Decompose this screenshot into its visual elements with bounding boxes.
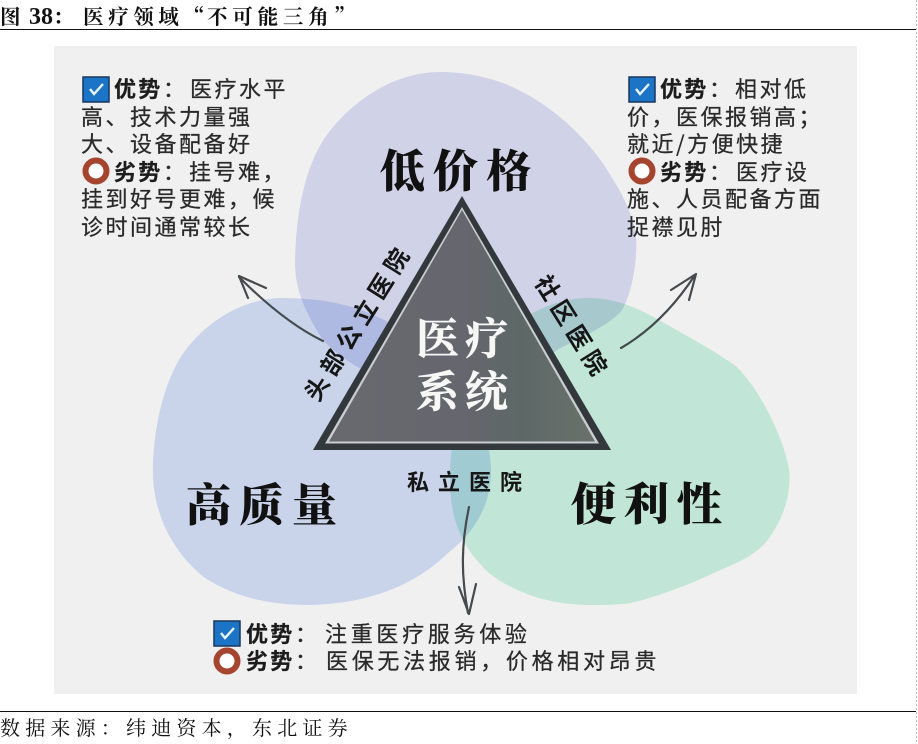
figure title: 38 — [29, 4, 53, 30]
cons text: 医疗设 — [736, 155, 810, 187]
heading: convenience: 便利性 — [571, 468, 730, 533]
panel: triangle illustration background — [54, 46, 857, 694]
source note: 数据来源：纬迪资本，东北证券 — [0, 712, 353, 741]
figure title: 不可能三角 — [207, 0, 334, 30]
cons text: ： — [163, 155, 188, 187]
cons text: 医保无法报销，价格相对昂贵 — [326, 644, 660, 676]
callout: top-left hospital pros and cons — [81, 72, 288, 242]
triangle label: 医疗 — [416, 306, 514, 367]
pros text: 大、设备配备好 — [81, 127, 253, 159]
triangle blobs — [153, 72, 790, 605]
label: community hospitals: 社区医院 — [528, 267, 620, 386]
callout: top-right hospital pros and cons — [627, 72, 823, 242]
triangle label — [416, 306, 514, 420]
cons text: ： — [295, 644, 321, 676]
cons text: 劣势 — [114, 155, 162, 187]
arrow: to top-right text — [621, 274, 696, 348]
arrow: to bottom text — [459, 507, 476, 614]
cons text: 挂到好号更难，候 — [81, 182, 277, 214]
arrow: to top-left text — [239, 276, 323, 341]
cons text: ： — [709, 155, 734, 187]
pros text: ： — [295, 617, 321, 649]
pros text: 医疗水平 — [190, 72, 288, 104]
pros text: 就近/方便快捷 — [627, 127, 785, 159]
cons text: 诊时间通常较长 — [81, 210, 253, 242]
icon: ring — [216, 650, 238, 672]
pros text: 优势 — [246, 617, 294, 649]
triangle outer border — [313, 196, 611, 450]
figure title: ： — [53, 0, 74, 30]
figure title: ” — [334, 0, 354, 30]
cons text: 施、人员配备方面 — [627, 182, 823, 214]
heading: low price: 低价格 — [380, 135, 539, 200]
cons text: 劣势 — [660, 155, 708, 187]
triangle: medical system — [313, 196, 611, 450]
pros text: 优势 — [660, 72, 708, 104]
label: big public hospitals: 头部公立医院 — [294, 236, 419, 407]
cons text: 劣势 — [246, 644, 294, 676]
pros text: ： — [709, 72, 734, 104]
figure title: 图 — [0, 0, 20, 30]
pros text: 优势 — [114, 72, 162, 104]
triangle label: 系统 — [416, 359, 514, 420]
label: private hospitals: 私立医院 — [407, 465, 531, 497]
pros text: ： — [163, 72, 188, 104]
cons text: 挂号难， — [189, 155, 287, 187]
figure title: 医疗领域 — [83, 0, 183, 30]
icon: check — [83, 77, 109, 102]
figure title: “ — [184, 0, 204, 30]
blob: high quality — [153, 298, 491, 605]
pros text: 相对低 — [735, 72, 809, 104]
pros text: 注重医疗服务体验 — [325, 617, 531, 649]
pros text: 高、技术力量强 — [81, 100, 253, 132]
triangle fill — [329, 210, 595, 442]
icon: ring — [86, 160, 106, 182]
callout: bottom hospital pros and cons — [214, 617, 660, 676]
heading: high quality: 高质量 — [186, 469, 345, 534]
blob: low price — [295, 72, 636, 395]
pros text: 价，医保报销高； — [627, 100, 823, 132]
icon: ring — [632, 160, 652, 182]
blob: convenience — [450, 298, 790, 605]
icon: check — [629, 77, 655, 102]
icon: check — [214, 621, 240, 646]
cons text: 捉襟见肘 — [627, 210, 725, 242]
triangle light inner line — [325, 207, 599, 444]
